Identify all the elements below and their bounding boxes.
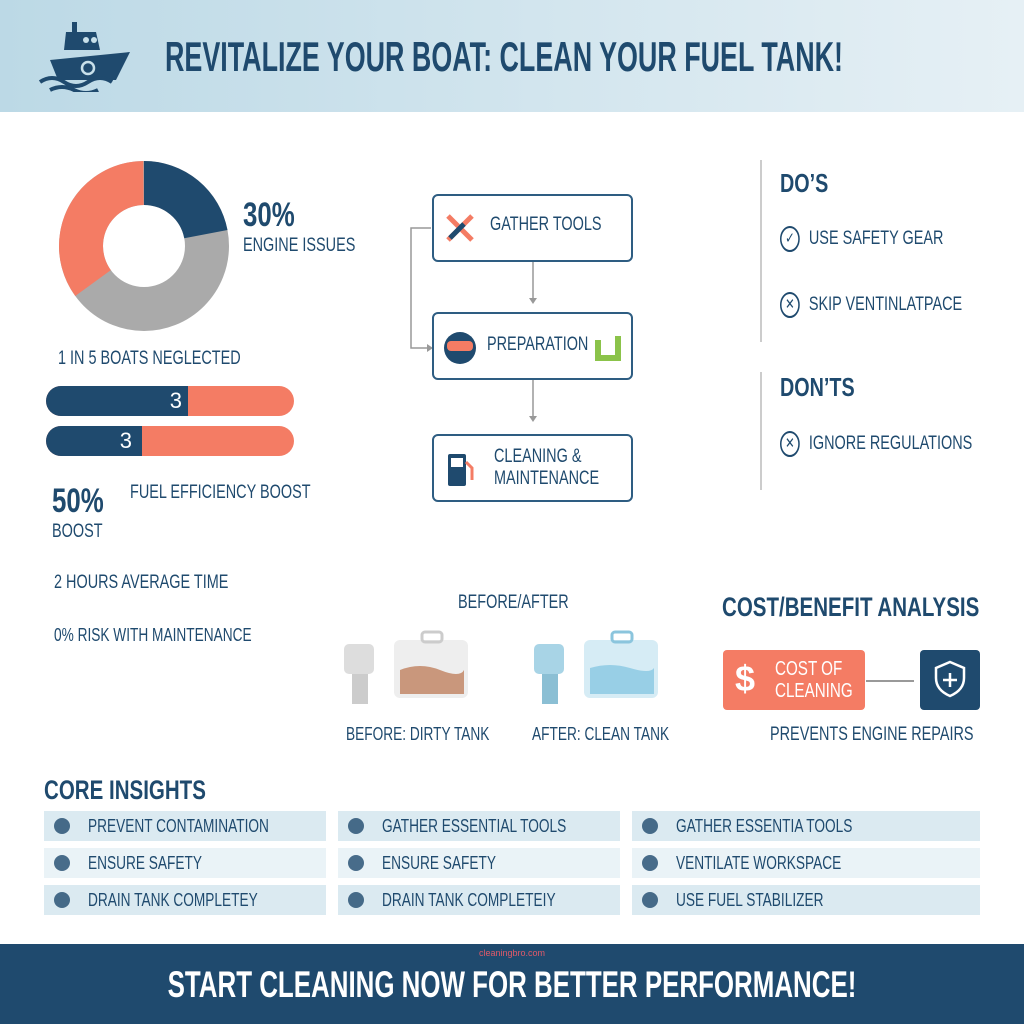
bar 2: 3 [120, 428, 132, 453]
core insights: GATHER ESSENTIA TOOLS [676, 816, 852, 836]
stat: 50% [52, 482, 104, 542]
heading: don'ts: DON’TS [780, 372, 855, 402]
header banner [0, 0, 1024, 112]
step: cleaning: CLEANING & [494, 446, 581, 467]
core insights: USE FUEL STABILIZER [676, 890, 823, 910]
core insights: VENTILATE WORKSPACE [676, 853, 841, 873]
cost box [723, 650, 865, 710]
footer banner: cleaningbro.com [479, 948, 545, 958]
cost/benefit panel [722, 592, 980, 745]
panel: do's and don'ts: IGNORE REGULATIONS [809, 433, 972, 454]
before/after panel: BEFORE: DIRTY TANK [346, 724, 489, 744]
stat: 50%: 50% [52, 482, 104, 520]
stat: 50%: BOOST [52, 521, 103, 542]
stat: 30% [243, 196, 355, 256]
step: gather tools [432, 194, 633, 262]
core insights: DRAIN TANK COMPLETEIY [382, 890, 556, 910]
step: preparation: PREPARATION [487, 334, 588, 355]
core insights: PREVENT CONTAMINATION [88, 816, 269, 836]
step: cleaning [432, 434, 633, 502]
cost/benefit panel: COST/BENEFIT ANALYSIS [722, 592, 979, 622]
cost box: COST OF [775, 658, 842, 680]
stat: 1 in 5: 1 IN 5 BOATS NEGLECTED [58, 348, 241, 369]
cost/benefit panel: PREVENTS ENGINE REPAIRS [770, 724, 974, 745]
core insights: CORE INSIGHTS [44, 775, 206, 805]
panel: do's and don'ts: ✓ [785, 230, 795, 247]
bar 1: 3 [170, 388, 182, 413]
step: cleaning: MAINTENANCE [494, 468, 599, 489]
panel: do's and don'ts: SKIP VENTINLATPACE [809, 294, 962, 315]
panel: do's and don'ts: ✕ [785, 296, 795, 313]
step: gather tools: GATHER TOOLS [490, 214, 602, 235]
bar 1 [46, 386, 294, 416]
panel: do's and don'ts [760, 160, 1010, 490]
stat: 30%: ENGINE ISSUES [243, 235, 355, 256]
stat: 30%: 30% [243, 196, 295, 234]
footer banner: START CLEANING NOW FOR BETTER PERFORMANCE! [168, 964, 856, 1005]
step: preparation [432, 312, 633, 380]
footer banner [0, 944, 1024, 1024]
panel: do's and don'ts: ✕ [785, 435, 795, 452]
heading: do's: DO’S [780, 168, 828, 198]
icon: dirty tank [344, 630, 468, 704]
core insights: GATHER ESSENTIAL TOOLS [382, 816, 566, 836]
icon: clean tank [534, 630, 658, 704]
donut chart [59, 161, 229, 331]
stat: hours: 2 HOURS AVERAGE TIME [54, 572, 228, 593]
core insights [44, 775, 980, 915]
bar 2 [46, 426, 294, 456]
core insights: ENSURE SAFETY [88, 853, 202, 873]
core insights: ENSURE SAFETY [382, 853, 496, 873]
icon: shield [920, 650, 980, 710]
before/after panel [344, 592, 669, 744]
title: REVITALIZE YOUR BOAT: CLEAN YOUR FUEL TANK! [165, 33, 843, 80]
icon: boat [39, 22, 130, 92]
before/after panel: AFTER: CLEAN TANK [532, 724, 669, 744]
before/after panel: BEFORE/AFTER [458, 592, 569, 613]
cost box: $ [735, 658, 755, 699]
flowchart [410, 194, 633, 502]
text: FUEL EFFICIENCY BOOST [130, 482, 311, 503]
panel: do's and don'ts: USE SAFETY GEAR [809, 228, 943, 249]
cost box: CLEANING [775, 680, 853, 702]
core insights: DRAIN TANK COMPLETEY [88, 890, 258, 910]
stat: risk: 0% RISK WITH MAINTENANCE [54, 625, 252, 645]
